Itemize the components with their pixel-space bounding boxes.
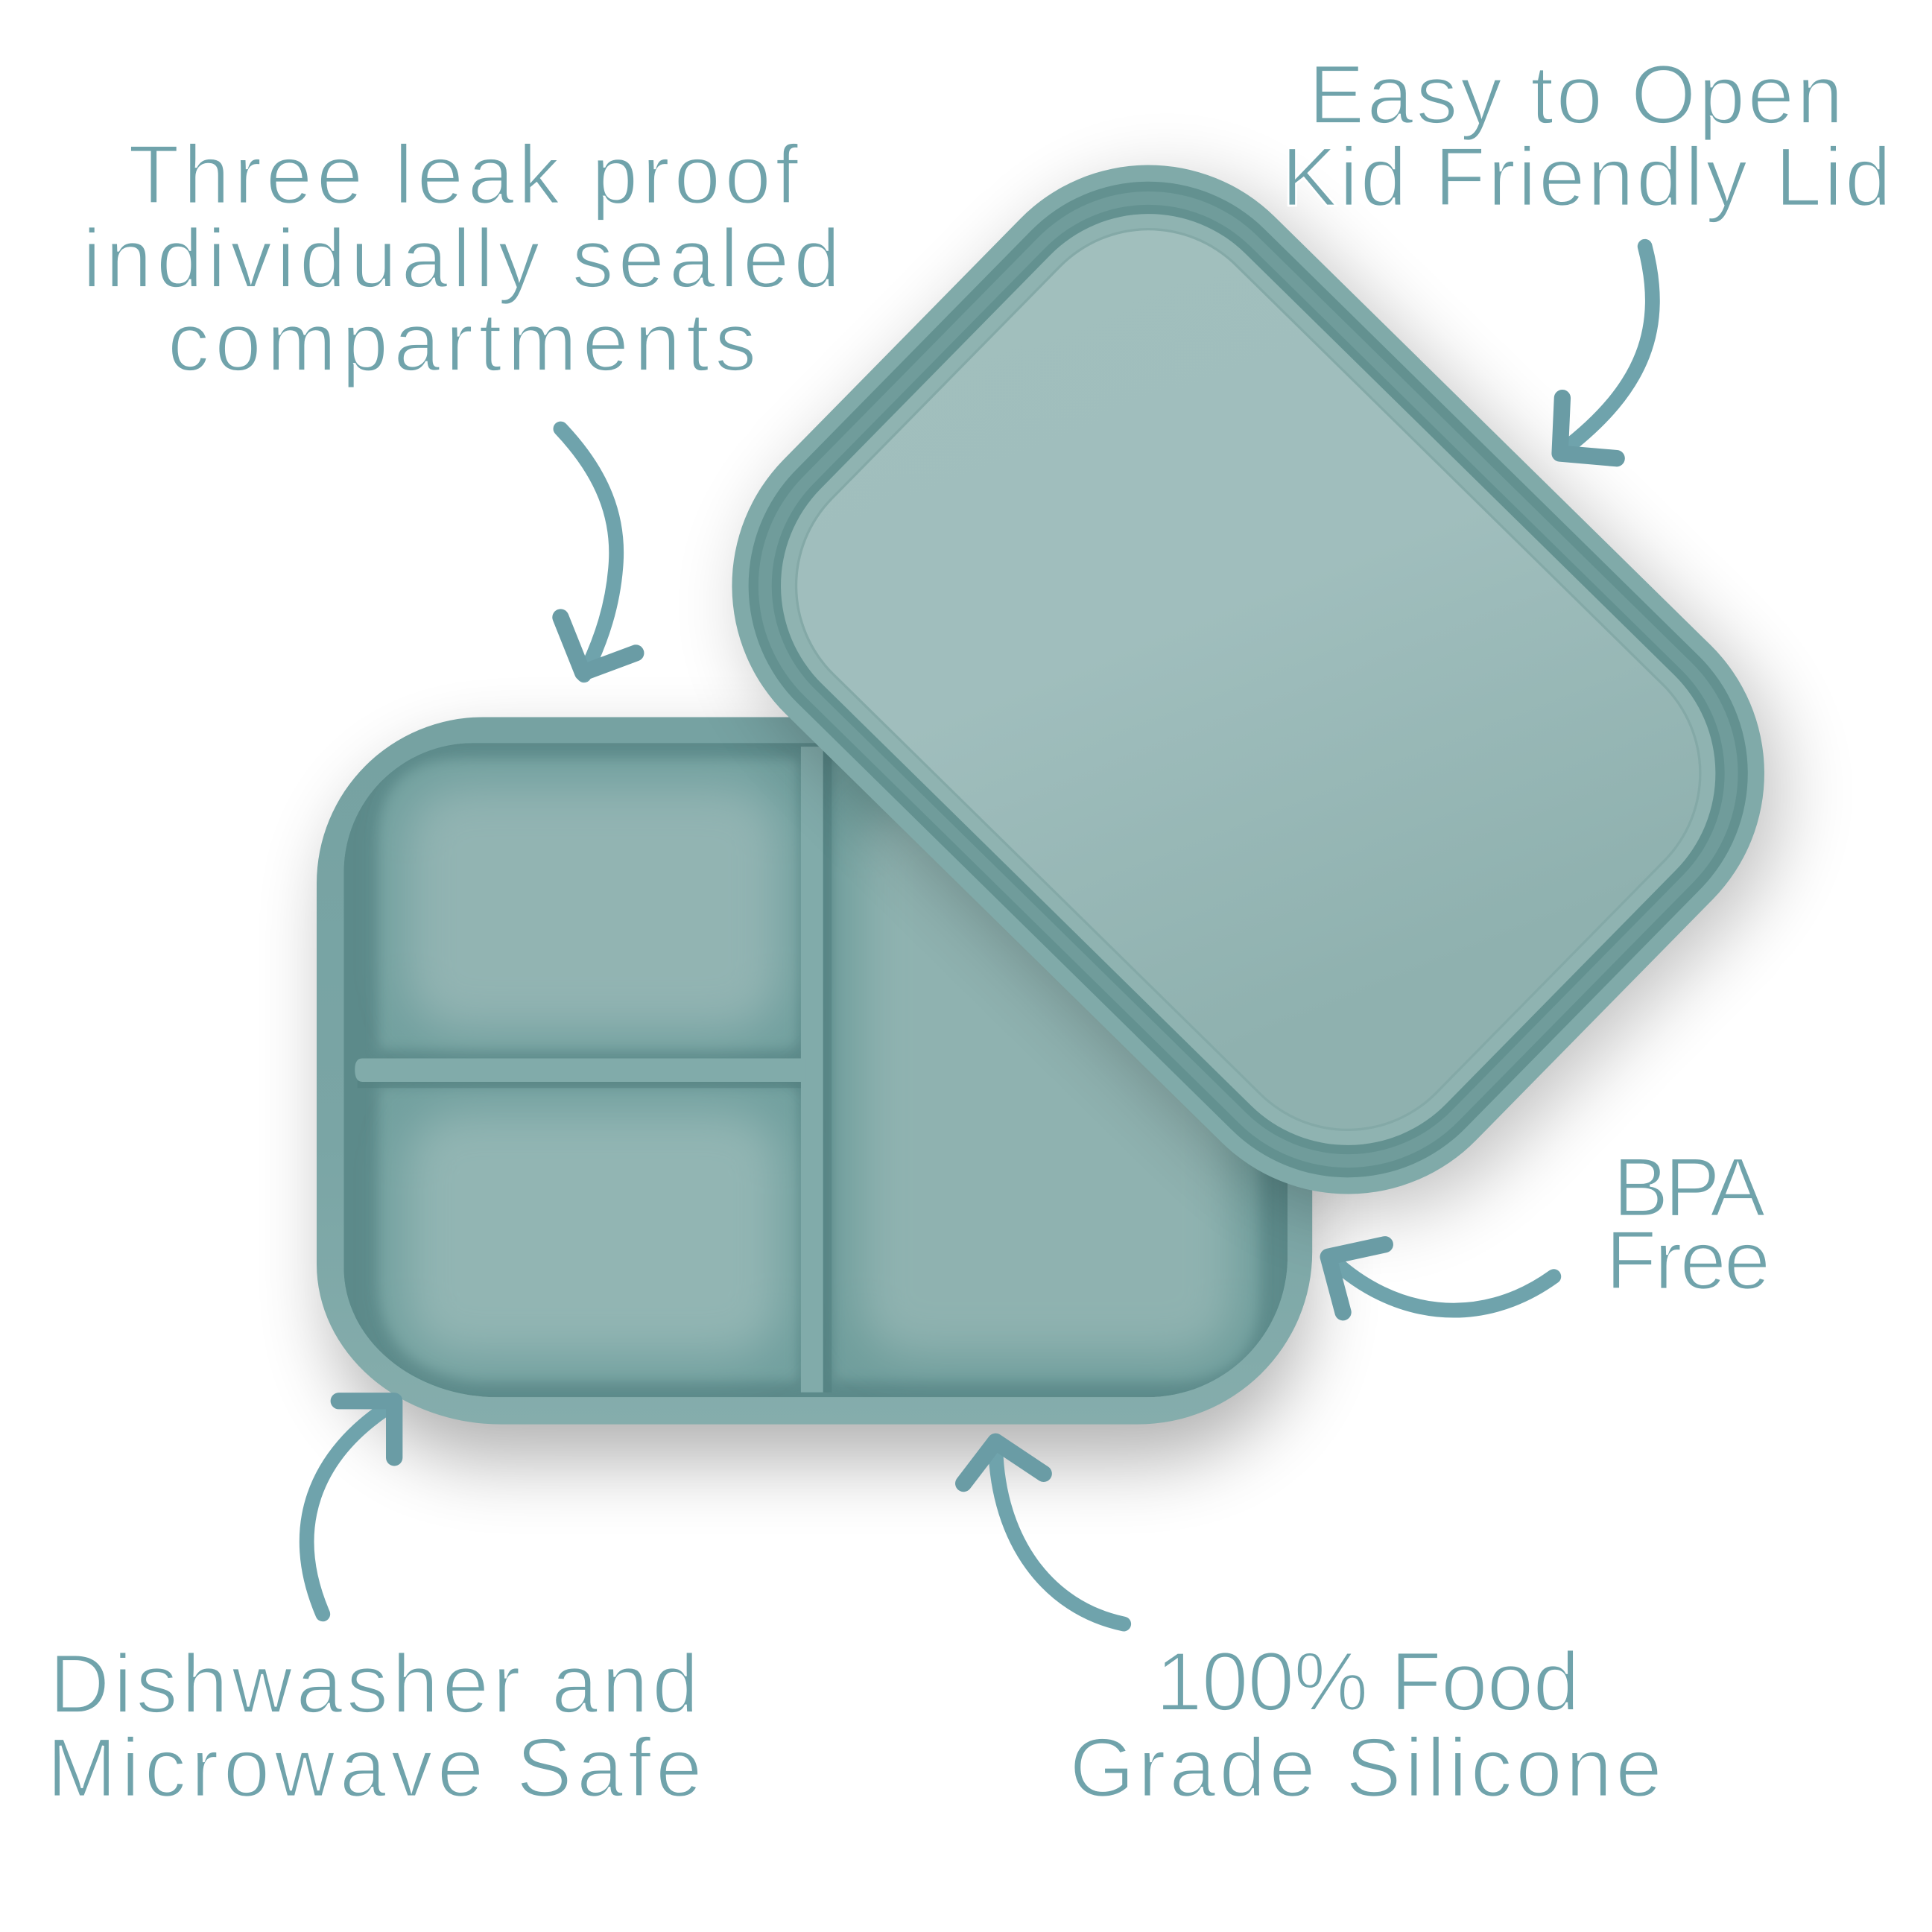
arrow: lid [1560,247,1653,458]
vertical divider [801,747,832,1393]
label: three leak proof compartments: individually sealed [83,211,840,305]
label: BPA free [1606,1140,1770,1307]
label: easy to open lid: Easy to Open [1308,47,1843,141]
label: dishwasher and microwave safe: Dishwasher and [49,1637,699,1731]
lid top plate [747,180,1750,1179]
label: food grade silicone: Grade Silicone [1069,1720,1662,1814]
label: BPA free: BPA [1613,1140,1766,1234]
lid groove highlight [694,127,1802,1232]
label: easy to open lid [1282,47,1891,224]
lid [657,91,1839,1268]
label: food grade silicone: 100% Food [1156,1634,1580,1728]
label: easy to open lid: Kid Friendly Lid [1282,130,1891,224]
arrow: BPA free [1328,1244,1553,1312]
lid raised ridge [723,156,1773,1203]
compartment floor: top left [379,759,799,1050]
arrow: food grade [963,1442,1124,1624]
compartment floor: right [833,759,1259,1381]
base drop shadow [332,752,1306,1460]
label: three leak proof compartments: compartments [168,295,756,389]
lid shadow on white and on base [675,110,1856,1288]
label: food grade silicone [1069,1634,1662,1814]
label: dishwasher and microwave safe [47,1637,703,1814]
lid outer rim [657,91,1839,1268]
arrow: compartments [560,428,636,675]
label: three leak proof compartments [83,127,840,389]
base inner well [343,743,1288,1397]
lunch box base [317,717,1312,1460]
arrow: dishwasher [307,1401,394,1614]
label: three leak proof compartments: Three leak proof [128,127,799,221]
horizontal divider [355,1059,806,1088]
lid second groove [712,145,1784,1214]
compartment floor: bottom left [379,1086,799,1381]
label: dishwasher and microwave safe: Microwave Safe [47,1720,703,1814]
base outer rim [317,717,1312,1425]
label: BPA free: Free [1606,1213,1770,1307]
lid ridge shadow line [743,176,1753,1183]
lid groove [680,113,1817,1246]
